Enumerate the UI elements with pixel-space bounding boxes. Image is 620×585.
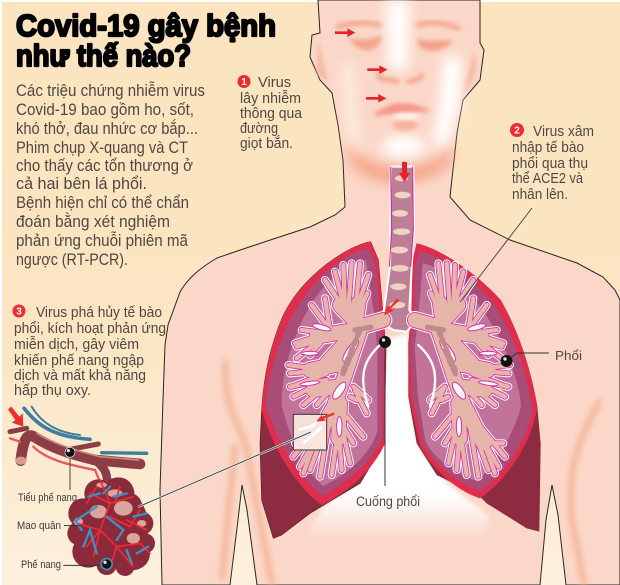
callout 3: phổi, kích hoạt phản ứng (14, 320, 166, 337)
label: Phế nang: Phế nang (21, 559, 61, 571)
blue vessels (24, 407, 147, 453)
left lung (260, 242, 386, 538)
detail box on left lung (293, 414, 327, 450)
intro text: ngược (RT-PCR). (16, 251, 128, 269)
intro text: đoán bằng xét nghiệm (16, 212, 170, 231)
callout 3: Virus phá hủy tế bào (36, 304, 162, 321)
callout 1: giọt bắn. (240, 135, 293, 152)
arrow: bronchus (384, 298, 399, 315)
intro text: cho thấy các tổn thương ở (16, 157, 193, 175)
leader: Cuống phổi (379, 336, 391, 486)
arrow: eye (335, 28, 355, 37)
leader: Phế nang (63, 558, 113, 570)
eyebrows (338, 23, 458, 28)
mouth (375, 103, 432, 119)
title: như thế nào? (16, 38, 191, 73)
label: Cuống phổi: Cuống phổi (356, 493, 420, 509)
intro text: khó thở, đau nhức cơ bắp... (16, 119, 198, 138)
callout 3 (12, 304, 166, 399)
nose (378, 75, 422, 82)
white gap between lungs (303, 333, 490, 540)
arrow: alveoli entry (8, 407, 23, 427)
intro text: phản ứng chuỗi phiên mã (16, 231, 189, 250)
leader: callout 2 (460, 208, 532, 302)
callout 3: dịch và mất khả năng (14, 367, 146, 384)
right bronchial tree (415, 263, 510, 477)
callout 1 (238, 74, 303, 152)
intro text (16, 81, 205, 269)
air passage (10, 428, 140, 483)
leader: Phổi (500, 353, 549, 367)
alveoli cluster (67, 477, 155, 576)
callout 2: nhập tế bào (512, 139, 584, 156)
callout 2: nhân lên. (512, 186, 568, 203)
arrow: mouth (366, 94, 386, 103)
trachea (377, 167, 417, 332)
lungs (260, 167, 541, 540)
callout 1: đường (240, 120, 278, 137)
callout 3: 3 (16, 306, 22, 318)
left bronchial tree (288, 263, 383, 477)
callout 1: thông qua (240, 105, 303, 122)
callout 2: thể ACE2 và (512, 170, 584, 187)
eyes (348, 35, 453, 51)
callout 2: 2 (514, 126, 520, 136)
callout 3: miễn dịch, gây viêm (14, 336, 139, 353)
body silhouette (160, 0, 620, 585)
alveoli illustration (8, 407, 155, 576)
leader: Tiểu phế nang (65, 447, 75, 490)
intro text: cả hai bên lá phổi. (16, 175, 147, 193)
callout 3: hấp thụ oxy. (14, 382, 91, 399)
callout 1: lây nhiễm (240, 90, 301, 107)
callout 1: 1 (241, 77, 247, 88)
callout 1: Virus (258, 74, 291, 91)
face (317, 0, 476, 183)
arrow: detail box (316, 413, 335, 422)
arm shadows (222, 360, 600, 585)
face shading (317, 0, 476, 183)
arrow: nose (367, 65, 387, 74)
callout 2: phổi qua thụ (512, 155, 588, 172)
title (16, 8, 276, 73)
intro text: Bệnh hiện chỉ có thể chẩn (16, 194, 189, 212)
leader: Mao quản (64, 524, 82, 527)
label: Mao quản: Mao quản (17, 520, 61, 532)
callout 2 (510, 123, 594, 203)
connector: lung to alveoli (138, 432, 311, 507)
callout 2: Virus xâm (533, 123, 594, 140)
label: Phổi: Phổi (555, 348, 582, 363)
trachea arrow (399, 162, 410, 182)
right lung (408, 243, 541, 532)
intro text: Các triệu chứng nhiễm virus (16, 81, 205, 100)
intro text: Phim chụp X-quang và CT (16, 139, 188, 157)
title: Covid-19 gây bệnh (16, 8, 276, 43)
intro text: Covid-19 bao gồm ho, sốt, (16, 101, 194, 119)
label: Tiểu phế nang: Tiểu phế nang (18, 492, 77, 504)
callout 3: khiến phế nang ngập (14, 352, 144, 369)
